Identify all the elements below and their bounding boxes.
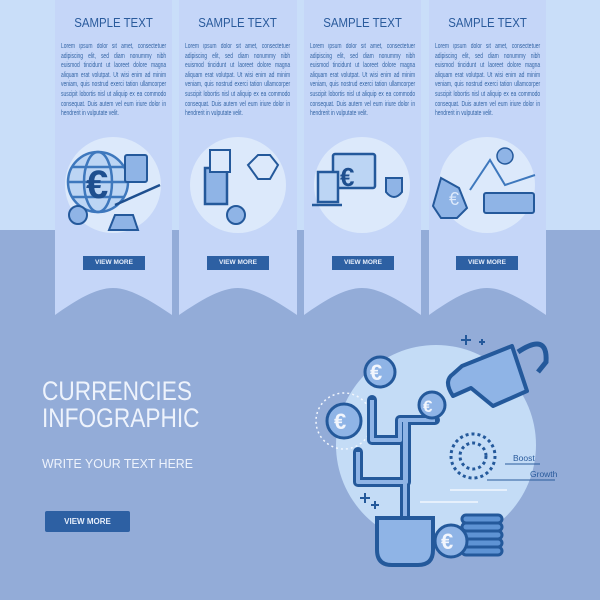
text: VIEW MORE <box>468 259 506 266</box>
icon: laptop <box>333 154 375 188</box>
subtitle: WRITE YOUR TEXT HERE <box>42 456 193 471</box>
title: CURRENCIES <box>42 376 192 406</box>
panels: € <box>86 163 108 207</box>
text: Lorem ipsum dolor sit amet, consectetuer adipiscing elit, sed diam nonummy nibh euismod tincidunt ut laoreet dolore magna aliquam erat volutpat. Ut wisi enim ad minim veniam, quis nostrud exerci tation ullamcorper suscipit lobortis nisl ut aliquip ex ea commodo consequat. Duis autem vel eum iriure dolor in hendrerit in vulputate velit. <box>185 43 290 117</box>
button: VIEW MORE <box>64 517 111 526</box>
illustration: money tree: € <box>370 360 382 385</box>
panels: € <box>340 162 354 192</box>
text: Lorem ipsum dolor sit amet, consectetuer adipiscing elit, sed diam nonummy nibh euismod tincidunt ut laoreet dolore magna aliquam erat volutpat. Ut wisi enim ad minim veniam, quis nostrud exerci tation ullamcorper suscipit lobortis nisl ut aliquip ex ea commodo consequat. Duis autem vel eum iriure dolor in hendrerit in vulputate velit. <box>61 43 166 117</box>
text: SAMPLE TEXT <box>74 15 153 30</box>
panel 2 text <box>185 15 290 270</box>
illustration: money tree: € <box>334 409 346 434</box>
button <box>45 511 130 532</box>
panel 3 text <box>310 15 416 270</box>
icon: globe euro <box>68 152 128 212</box>
text: SAMPLE TEXT <box>198 15 277 30</box>
text: VIEW MORE <box>95 259 133 266</box>
text: SAMPLE TEXT <box>448 15 527 30</box>
panel 4 text <box>435 15 540 270</box>
icon: hand <box>205 168 227 204</box>
illustration: money tree: Growth <box>530 469 558 479</box>
title <box>42 376 200 433</box>
illustration: money tree: € <box>441 529 453 554</box>
panel 1 text <box>61 15 166 270</box>
text: VIEW MORE <box>219 259 257 266</box>
text: SAMPLE TEXT <box>323 15 402 30</box>
title: INFOGRAPHIC <box>42 403 200 433</box>
panels: € <box>449 189 459 209</box>
illustration: money tree: € <box>423 397 433 416</box>
text: VIEW MORE <box>344 259 382 266</box>
text: Lorem ipsum dolor sit amet, consectetuer adipiscing elit, sed diam nonummy nibh euismod tincidunt ut laoreet dolore magna aliquam erat volutpat. Ut wisi enim ad minim veniam, quis nostrud exerci tation ullamcorper suscipit lobortis nisl ut aliquip ex ea commodo consequat. Duis autem vel eum iriure dolor in hendrerit in vulputate velit. <box>310 43 415 117</box>
illustration: money tree: Boost <box>513 453 535 463</box>
icon: chart <box>433 178 467 218</box>
text: Lorem ipsum dolor sit amet, consectetuer adipiscing elit, sed diam nonummy nibh euismod tincidunt ut laoreet dolore magna aliquam erat volutpat. Ut wisi enim ad minim veniam, quis nostrud exerci tation ullamcorper suscipit lobortis nisl ut aliquip ex ea commodo consequat. Duis autem vel eum iriure dolor in hendrerit in vulputate velit. <box>435 43 540 117</box>
